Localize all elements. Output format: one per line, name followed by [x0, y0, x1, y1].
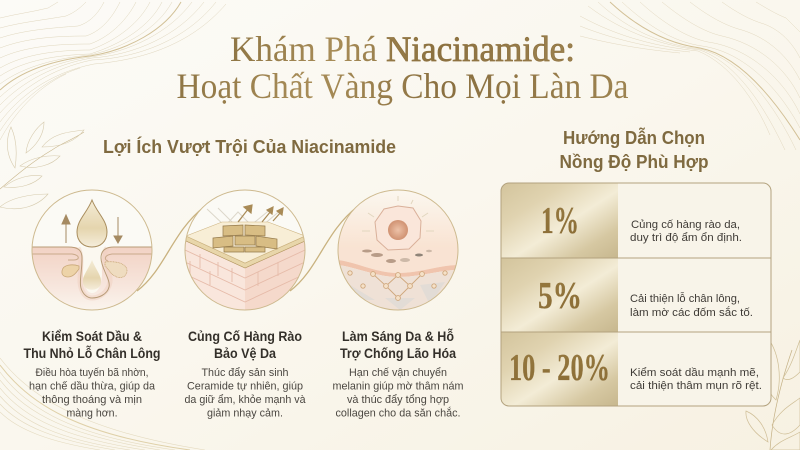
benefit 3 text: melanin giúp mờ thâm nám: [332, 380, 464, 392]
description 5%: làm mờ các đốm sắc tố.: [630, 306, 753, 319]
benefit 2 text: Bảo Vệ Da: [214, 346, 276, 361]
value 10-20%: 10 - 20%: [509, 347, 610, 389]
benefit 3 text: Trợ Chống Lão Hóa: [340, 346, 456, 361]
title: Khám Phá Niacinamide:: [230, 29, 575, 69]
connector ribbons between circles: [137, 207, 357, 291]
benefit 1 text: màng hơn.: [66, 408, 118, 420]
top surface: [186, 222, 305, 263]
description 1%: Củng cố hàng rào da,: [631, 219, 740, 231]
benefit 1 text: Điều hòa tuyến bã nhờn,: [36, 367, 148, 379]
icon: skin cell and collagen: [338, 190, 458, 312]
brick lines: [185, 250, 305, 302]
benefit 2 text: giảm nhạy cảm.: [207, 408, 283, 420]
arrow up: [62, 215, 70, 243]
heading: benefits: Lợi Ích Vượt Trội Của Niacinamide: [103, 136, 396, 157]
benefit 3 text: và thúc đẩy tổng hợp: [347, 394, 449, 406]
benefit 3 text: [332, 329, 464, 420]
nucleus: [388, 220, 408, 240]
inner oil drop: [83, 260, 101, 290]
large oil drop: [77, 200, 107, 247]
value 5%: 5%: [538, 275, 582, 317]
decorative leaf sprig: bottom right: [746, 338, 800, 450]
decorative wave: bottom left: [0, 358, 205, 450]
dermis: [340, 266, 454, 310]
sebaceous gland left: [62, 265, 79, 277]
pore outline: [30, 247, 154, 298]
heading: concentration guide: Hướng Dẫn Chọn: [563, 127, 705, 148]
icon: barrier bricks: [185, 190, 305, 312]
gold layers: [186, 236, 305, 268]
panel: concentration table: [501, 183, 771, 406]
benefit 1 text: thông thoáng và mịn: [42, 394, 142, 406]
cell: [375, 206, 421, 250]
benefit 2 text: Thúc đẩy sản sinh: [202, 367, 288, 379]
pore white interior: [76, 247, 108, 293]
wall right face: [245, 240, 305, 312]
benefit 3 text: Hạn chế vận chuyển: [349, 367, 447, 379]
benefit 2 text: Ceramide tự nhiên, giúp: [187, 380, 303, 392]
sebaceous gland right: [105, 262, 127, 278]
decorative leaf sprig: left: [0, 122, 84, 209]
decorative wave: top left: [0, 2, 226, 140]
skin bands: [338, 247, 458, 273]
row 1% gold cell: [501, 183, 618, 258]
description 10-20%: Kiểm soát dầu mạnh mẽ,: [630, 367, 759, 379]
benefit 1 text: hạn chế dầu thừa, giúp da: [29, 380, 156, 392]
heading: concentration guide: [560, 127, 708, 172]
benefit 3 text: Làm Sáng Da & Hỗ: [342, 329, 454, 344]
decorative wave: top right: [580, 2, 800, 150]
rays: [362, 196, 434, 231]
wall left face: [185, 240, 245, 312]
icon: oil control pore: [30, 190, 154, 313]
upward arrows: [238, 205, 283, 222]
description 1%: duy trì độ ẩm ổn định.: [630, 232, 742, 244]
benefit 3 text: collagen cho da săn chắc.: [336, 406, 460, 420]
description 5%: [630, 292, 753, 319]
benefit 2 text: Củng Cố Hàng Rào: [188, 329, 302, 344]
value 1%: 1%: [541, 200, 579, 242]
description 10-20%: [630, 367, 762, 392]
row 5% gold cell: [501, 258, 618, 332]
collagen lattice: [348, 271, 447, 300]
description 10-20%: cải thiện thâm mụn rõ rệt.: [630, 380, 762, 392]
zigzag rays: [206, 208, 278, 222]
benefit 2 text: da giữ ẩm, khỏe mạnh và: [184, 394, 306, 406]
brick pile: [213, 225, 277, 252]
heading: concentration guide: Nồng Độ Phù Hợp: [560, 152, 708, 172]
pore fold band: [78, 248, 110, 298]
melanin spots: [362, 250, 432, 263]
arrow down: [114, 217, 122, 243]
description 1%: [630, 219, 742, 244]
benefit 1 text: Kiểm Soát Dầu &: [42, 329, 142, 344]
description 5%: Cải thiện lỗ chân lông,: [630, 292, 740, 305]
skin layer: [30, 247, 154, 313]
row 10-20% gold cell: [501, 332, 618, 406]
benefit 2 text: [184, 329, 306, 420]
title: [176, 29, 629, 106]
title: Hoạt Chất Vàng Cho Mọi Làn Da: [176, 66, 629, 106]
benefit 1 text: [24, 329, 160, 420]
benefit 1 text: Thu Nhỏ Lỗ Chân Lông: [24, 346, 160, 361]
